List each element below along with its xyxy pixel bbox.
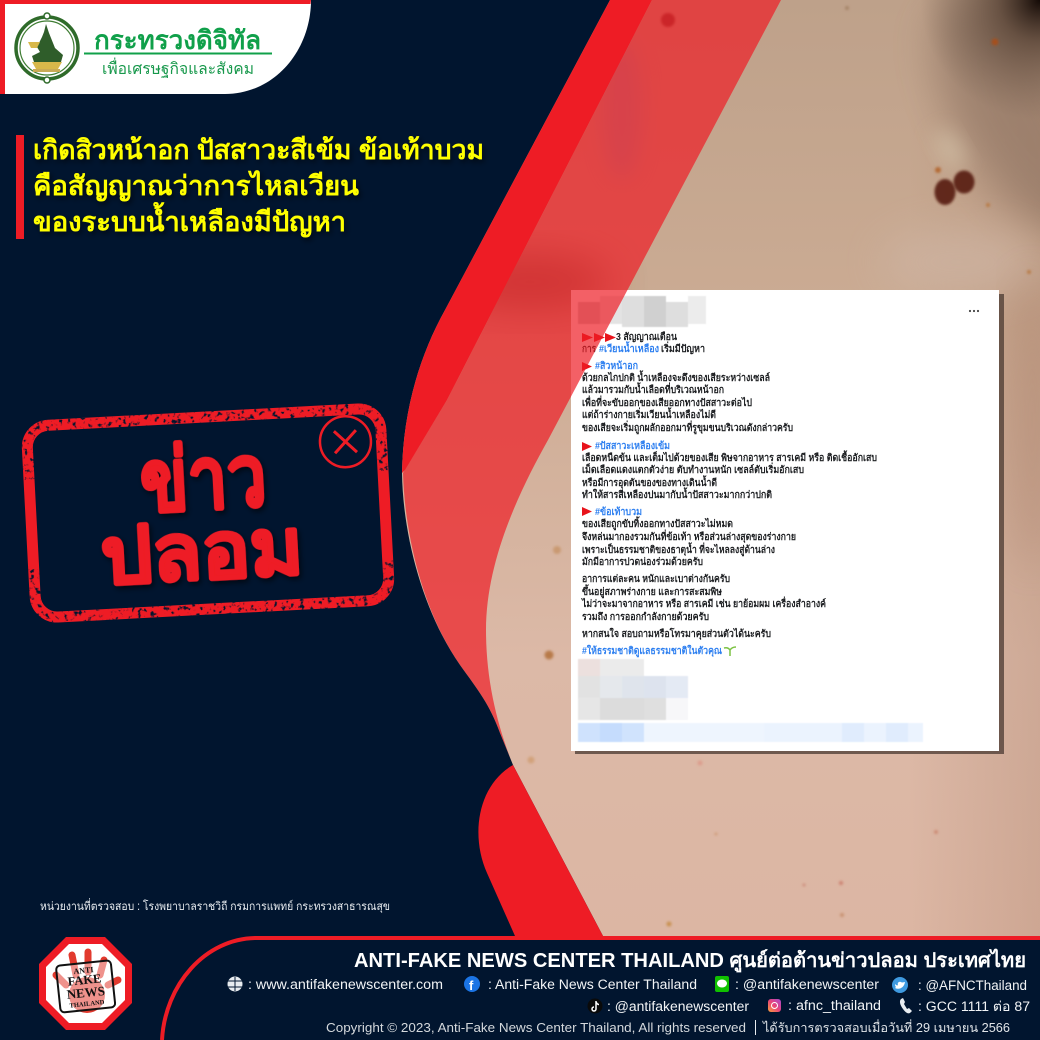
post text: แล้วมารวมกับน้ำเลือดที่บริเวณหน้าอก (582, 382, 724, 396)
solid red diagonal band (402, 0, 652, 473)
post text: เลือดหนืดข้น และเต็มไปด้วยของเสีย พิษจากอาหาร สารเคมี หรือ ติดเชื้ออักเสบ (582, 450, 877, 464)
icon: facebook: f (469, 978, 474, 993)
anti fake news octagon logo (39, 937, 132, 1030)
post text: การ (582, 344, 597, 355)
post text: 3 สัญญาณเตือน (616, 331, 677, 343)
ministry tagline: เพื่อเศรษฐกิจและสังคม (102, 57, 254, 78)
social post screenshot card (571, 290, 1004, 754)
headline (16, 135, 484, 239)
post text: #ให้ธรรมชาติดูแลธรรมชาติในตัวคุณ (582, 644, 723, 658)
hand (56, 952, 118, 1013)
translucent red diagonal band (403, 0, 781, 765)
stamp label (56, 960, 115, 1013)
copyright: Copyright © 2023, Anti-Fake News Center Thailand, All rights reserved (326, 1021, 746, 1035)
post text: เพราะเป็นธรรมชาติของธาตุน้ำ ที่จะไหลลงสู่ด้านล่าง (582, 542, 775, 557)
icon: facebook (464, 976, 480, 993)
post text: เริ่มมีปัญหา (661, 341, 705, 355)
icon: globe (228, 976, 242, 992)
website: : www.antifakenewscenter.com (248, 977, 443, 992)
stamp text (95, 426, 305, 601)
red lower curved shape (478, 765, 603, 936)
emblem (16, 13, 78, 83)
verifying agency credit: หน่วยงานที่ตรวจสอบ : โรงพยาบาลราชวิถี กรมการแพทย์ กระทรวงสาธารณสุข (40, 898, 390, 913)
post text: ด้วยกลไกปกติ น้ำเหลืองจะดึงของเสียระหว่างเซลล์ (582, 370, 770, 384)
post text: ไม่ว่าจะมาจากอาหาร หรือ สารเคมี เช่น ยาย้อมผม เครื่องสำอางค์ (581, 596, 826, 610)
stamp cross icon (319, 415, 372, 469)
blurred link row (578, 723, 923, 742)
post text: รวมถึง การออกกำลังกายด้วยครับ (582, 611, 709, 623)
post text: หากสนใจ สอบถามหรือโทรมาคุยส่วนตัวได้นะครับ (582, 627, 771, 640)
stamp label: FAKE (67, 971, 102, 989)
navy background panel (0, 0, 610, 1040)
post text: แต่ถ้าร่างกายเริ่มเวียนน้ำเหลืองไม่ดี (582, 407, 716, 421)
headline: คือสัญญาณว่าการไหลเวียน (33, 170, 360, 202)
blurred account name (578, 296, 706, 327)
ministry logo panel (0, 0, 311, 94)
footer heading: ANTI-FAKE NEWS CENTER THAILAND ศูนย์ต่อต้านข่าวปลอม ประเทศไทย (354, 948, 1026, 974)
menu dots (969, 310, 979, 312)
post text: ขึ้นอยู่สภาพร่างกาย และการสะสมพิษ (582, 584, 722, 599)
call center: : GCC 1111 ต่อ 87 (918, 999, 1030, 1014)
post text: #เวียนน้ำเหลือง (599, 341, 659, 355)
stamp text: ปลอม (99, 502, 305, 601)
post text: ของเสียถูกขับทิ้งออกทางปัสสาวะไม่หมด (582, 516, 733, 531)
facebook page: : Anti-Fake News Center Thailand (488, 977, 697, 992)
post text: หรือมีการอุดตันของของทางเดินน้ำดี (582, 475, 717, 489)
post text: ทำให้สารสีเหลืองปนมากับน้ำปัสสาวะมากกว่าปกติ (582, 487, 772, 501)
post text: #สิวหน้าอก (595, 360, 638, 372)
tiktok account: : @antifakenewscenter (607, 999, 750, 1014)
stamp label: NEWS (66, 983, 106, 1002)
post text: อาการแต่ละคน หนักและเบาต่างกันครับ (582, 573, 730, 585)
headline: ของระบบน้ำเหลืองมีปัญหา (33, 201, 346, 238)
instagram account: : afnc_thailand (788, 998, 881, 1013)
headline: เกิดสิวหน้าอก ปัสสาวะสีเข้ม ข้อเท้าบวม (33, 135, 484, 165)
post text: #ปัสสาวะเหลืองเข้ม (595, 440, 670, 452)
photo: skin background (380, 0, 1040, 940)
verification date: ได้รับการตรวจสอบเมื่อวันที่ 29 เมษายน 2566 (762, 1019, 1010, 1035)
icon: line (715, 976, 729, 992)
stamp label: THAILAND (69, 999, 105, 1010)
post text: มักมีอาการปวดน่องร่วมด้วยครับ (582, 556, 703, 568)
line account: : @antifakenewscenter (735, 977, 880, 992)
post text: เม็ดเลือดแดงแตกตัวง่าย ตับทำงานหนัก เซลล์ตับเริ่มอักเสบ (582, 462, 804, 476)
twitter account: : @AFNCThailand (918, 978, 1027, 993)
post text: ของเสียจะเริ่มถูกผลักออกมาที่รูขุมขนบริเวณดังกล่าวครับ (582, 420, 793, 435)
stamp text: ข่าว (138, 428, 269, 530)
post text: #ข้อเท้าบวม (595, 506, 642, 518)
post text: เพื่อที่จะขับออกของเสียออกทางปัสสาวะต่อไป (582, 395, 752, 409)
icon: instagram (768, 999, 781, 1012)
icon: tiktok (588, 998, 602, 1014)
ministry name: กระทรวงดิจิทัล (94, 25, 261, 55)
post text: จึงหล่นมากองรวมกันที่ข้อเท้า หรือส่วนล่างสุดของร่างกาย (582, 529, 796, 543)
stamp label: ANTI (73, 965, 94, 976)
skin moles (528, 6, 1031, 926)
post text (581, 331, 877, 658)
icon: twitter (892, 977, 908, 993)
icon: phone (900, 998, 912, 1013)
footer bar (162, 938, 1040, 1040)
fake news stamp (26, 408, 390, 618)
blurred author block (578, 659, 688, 720)
